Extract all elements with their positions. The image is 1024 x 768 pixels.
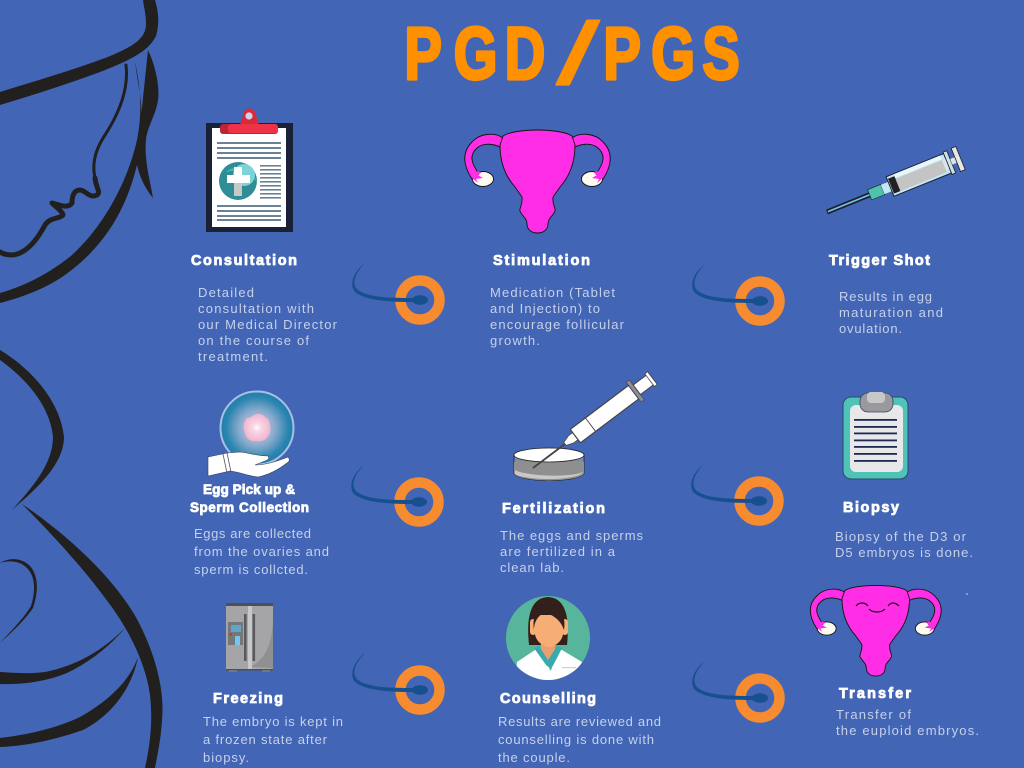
text: freezing description: The embryo is kept in <box>203 714 343 729</box>
icon: uterus <box>465 130 610 233</box>
text: trigger shot description: ovulation. <box>839 321 902 336</box>
connector: sperm and ring 2 <box>692 264 780 320</box>
heading: consultation: Consultation <box>191 253 297 269</box>
panel: counselling <box>498 596 661 765</box>
text: biopsy description <box>835 529 973 560</box>
text: counselling description <box>498 714 661 765</box>
text: egg pick up description: Eggs are collected <box>194 526 311 541</box>
text: stimulation description: and Injection) to <box>490 301 600 316</box>
heading: egg pick up and sperm collection: Sperm Collection <box>190 500 309 515</box>
silhouette: head and hair line art <box>0 0 158 303</box>
text: trigger shot description: maturation and <box>839 305 943 320</box>
text: counselling description: the couple. <box>498 750 570 765</box>
icon: syringe <box>822 146 965 224</box>
silhouette: belly line art <box>0 350 163 768</box>
text: freezing description: biopsy. <box>203 750 249 765</box>
panel: consultation <box>191 108 338 364</box>
heading: egg pick up and sperm collection: Egg Pick up & <box>203 482 295 497</box>
connector: sperm and ring 5 <box>352 653 440 710</box>
text: consultation description: consultation with <box>198 301 314 316</box>
text: transfer description: the euploid embryos. <box>836 723 979 738</box>
text: consultation description: on the course of <box>198 333 309 348</box>
text: stimulation description <box>490 285 625 348</box>
text: freezing description: a frozen state after <box>203 732 328 747</box>
text: freezing description <box>203 714 343 765</box>
heading: counselling: Counselling <box>500 691 596 707</box>
panel: freezing <box>203 603 343 765</box>
icon: refrigerator <box>226 603 273 672</box>
icon: doctor avatar <box>506 596 590 680</box>
heading: stimulation: Stimulation <box>493 253 590 269</box>
panel: fertilization <box>500 368 660 575</box>
heading: trigger shot: Trigger Shot <box>829 253 930 269</box>
icon: egg in hand <box>208 392 294 477</box>
heading: egg pick up and sperm collection <box>190 482 309 515</box>
text: egg pick up description <box>194 526 329 577</box>
icon: medical clipboard <box>206 108 293 232</box>
connector: sperm and ring 3 <box>351 465 438 522</box>
icon: petri dish and syringe <box>514 368 660 480</box>
panel: biopsy <box>835 392 973 560</box>
title: PGD <box>404 13 545 95</box>
text: fertilization description: The eggs and sperms <box>500 528 644 543</box>
title: PGS <box>603 13 740 95</box>
panel: stimulation <box>465 130 625 348</box>
text: egg pick up description: from the ovaries and <box>194 544 329 559</box>
panel: transfer <box>810 585 979 738</box>
text: transfer description: Transfer of <box>836 707 911 722</box>
heading: biopsy: Biopsy <box>843 500 899 516</box>
icon: smiling uterus <box>810 585 941 676</box>
text: biopsy description: D5 embryos is done. <box>835 545 973 560</box>
title: / <box>556 4 599 103</box>
heading: transfer: Transfer <box>839 686 911 702</box>
text: fertilization description: are fertilized in a <box>500 544 616 559</box>
text: consultation description: treatment. <box>198 349 268 364</box>
text: stimulation description: Medication (Tablet <box>490 285 615 300</box>
text: biopsy description: Biopsy of the D3 or <box>835 529 967 544</box>
text: consultation description <box>198 285 338 364</box>
heading: fertilization: Fertilization <box>502 501 605 517</box>
icon: teal clipboard <box>843 392 908 479</box>
text: counselling description: Results are reviewed and <box>498 714 661 729</box>
text: consultation description: Detailed <box>198 285 254 300</box>
text: fertilization description <box>500 528 644 575</box>
title <box>404 4 740 103</box>
text: fertilization description: clean lab. <box>500 560 564 575</box>
heading: freezing: Freezing <box>213 691 283 707</box>
text: egg pick up description: sperm is collcted. <box>194 562 308 577</box>
text: counselling description: counselling is done with <box>498 732 654 747</box>
connector: sperm and ring 4 <box>691 464 778 520</box>
panel: egg pick up <box>190 392 329 577</box>
text: transfer description <box>836 707 979 738</box>
text: consultation description: our Medical Director <box>198 317 338 332</box>
text: trigger shot description <box>839 289 943 336</box>
connector: sperm and ring 1 <box>352 263 440 320</box>
text: stimulation description: growth. <box>490 333 540 348</box>
connector: sperm and ring 6 <box>692 661 780 718</box>
panel: trigger shot <box>822 146 965 336</box>
text: stimulation description: encourage follicular <box>490 317 625 332</box>
text: trigger shot description: Results in egg <box>839 289 932 304</box>
